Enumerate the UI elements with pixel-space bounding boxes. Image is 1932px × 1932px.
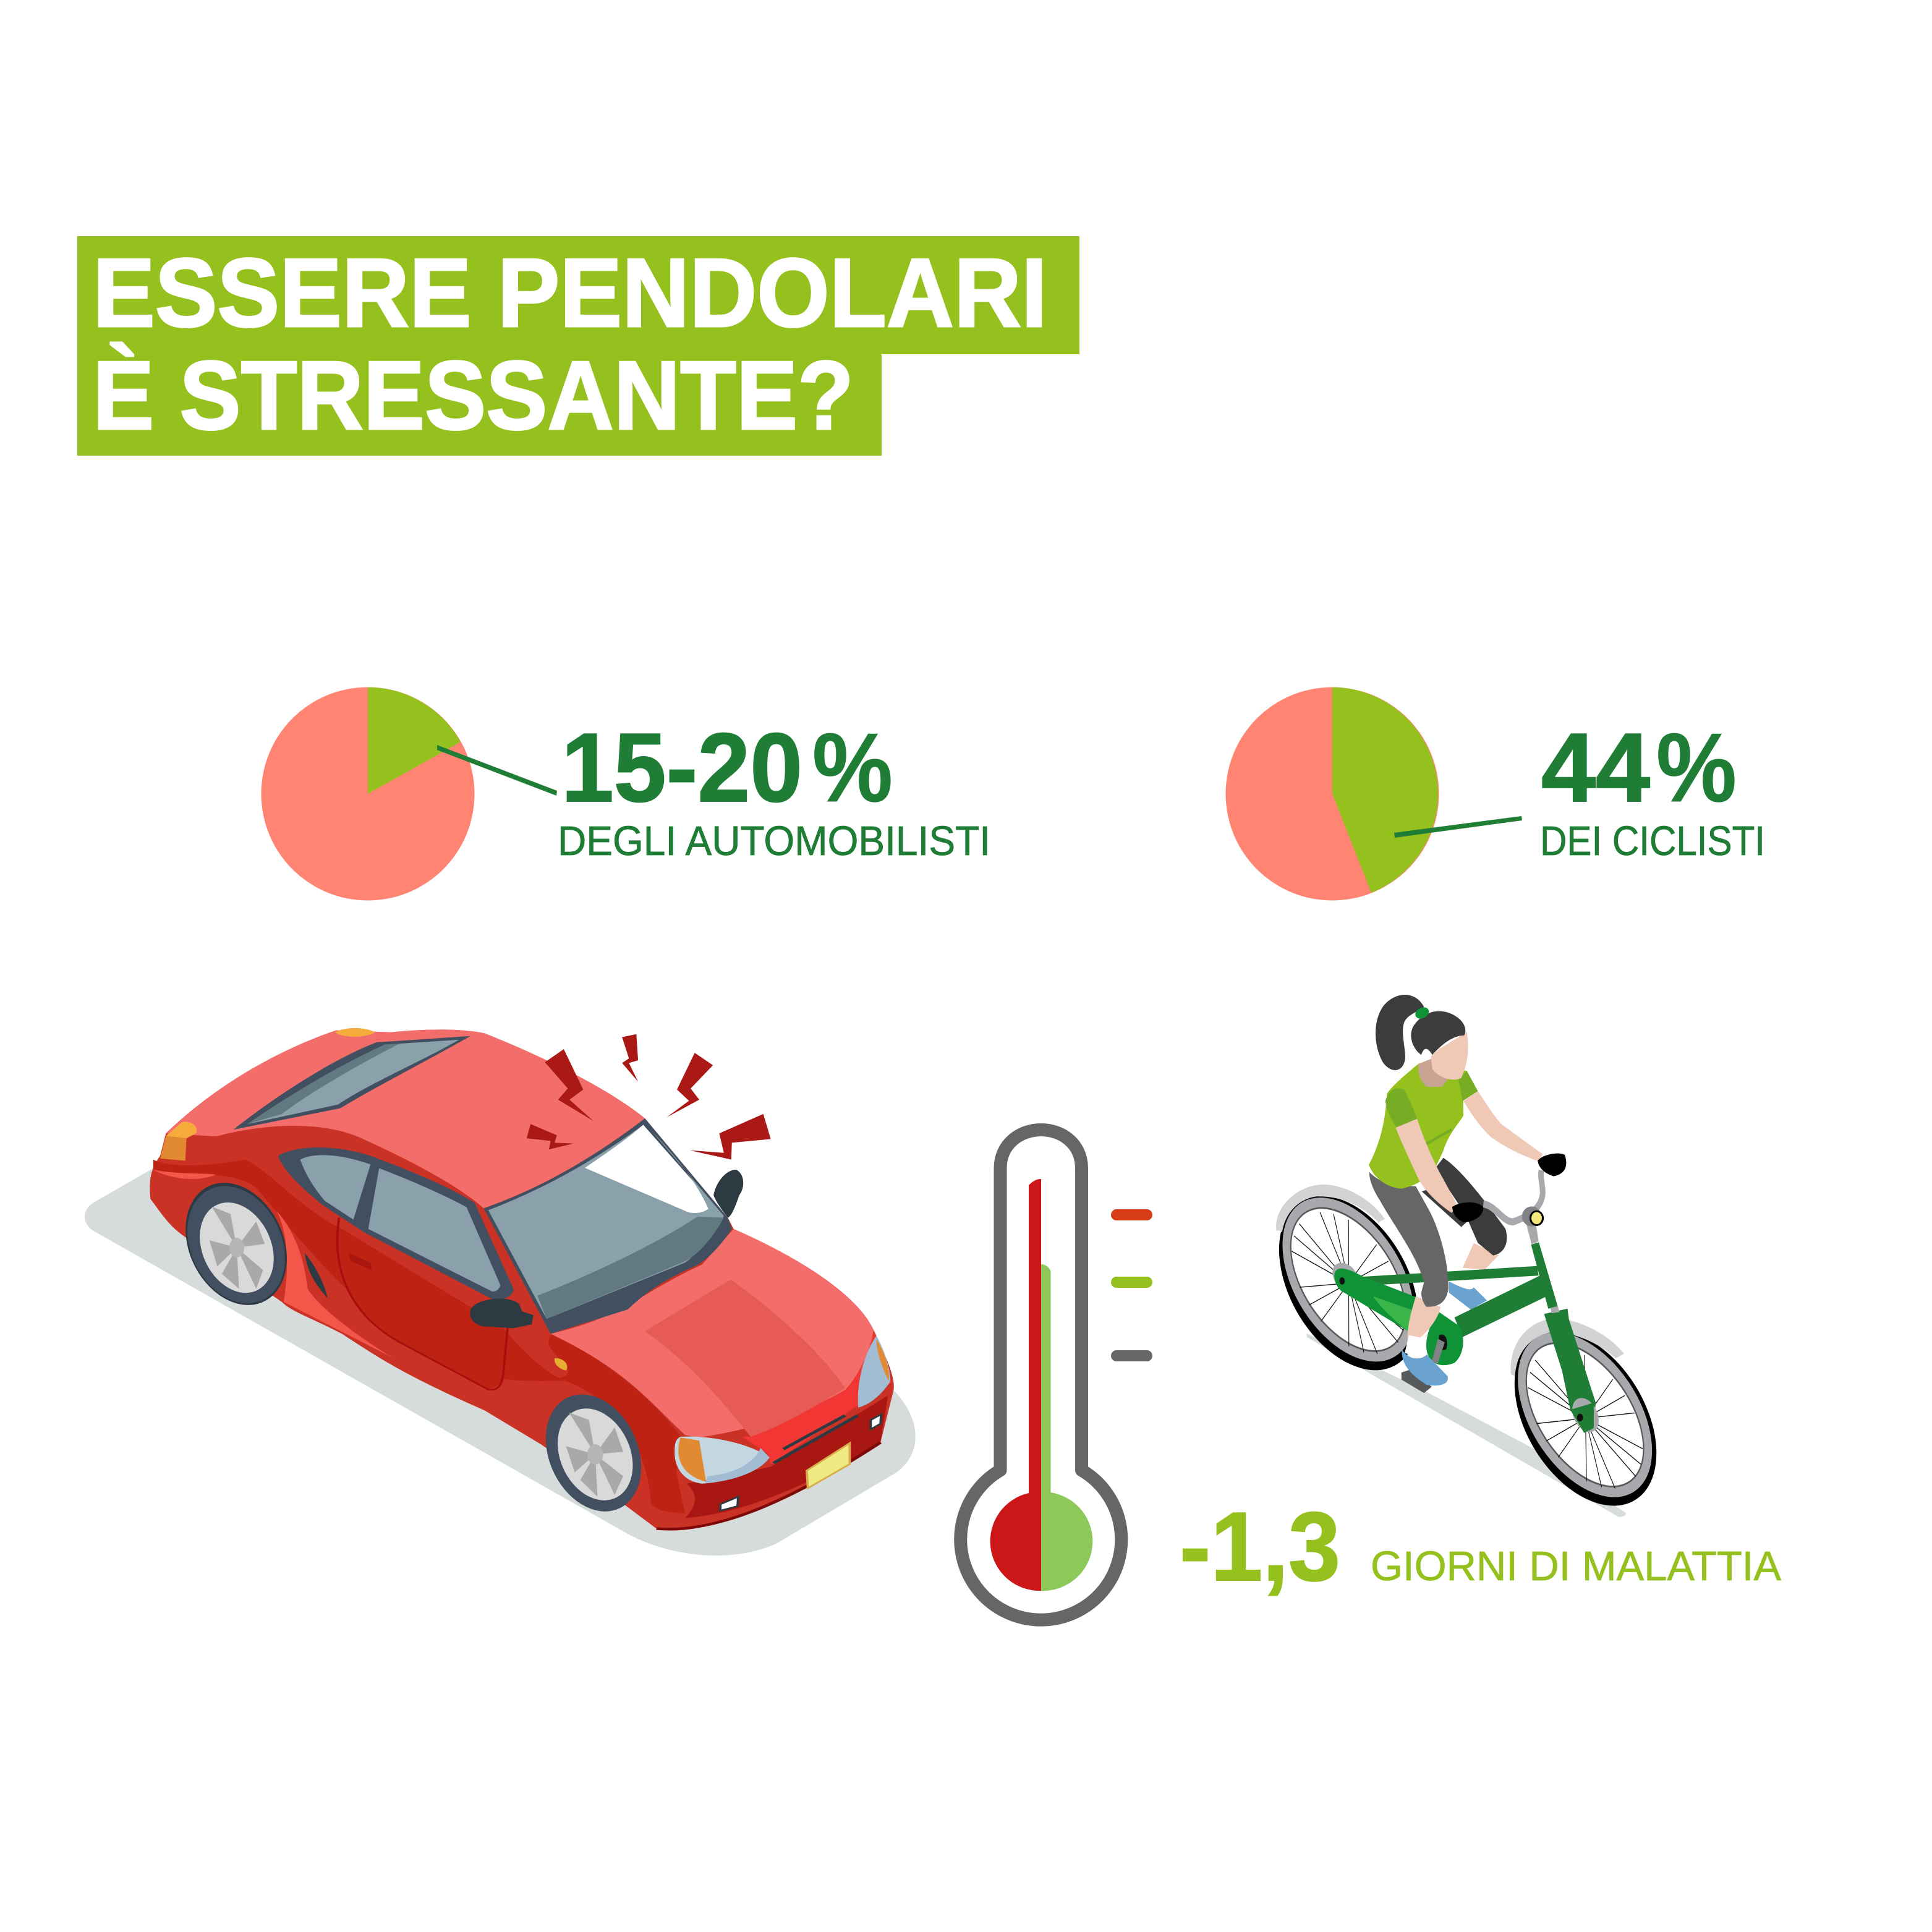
statistic: cyclists: DEI CICLISTI (1540, 818, 1765, 864)
statistic: drivers: % (812, 713, 893, 822)
rider neck and face (1418, 1032, 1468, 1087)
roof and trunk (166, 1029, 645, 1208)
car shadow (85, 1168, 916, 1555)
statistic: sick days: -1,3 (1180, 1492, 1340, 1601)
statistic: drivers: 15-20 (561, 713, 802, 822)
handlebar and saddle (1422, 1170, 1544, 1245)
hood panel (645, 1280, 845, 1437)
front bumper (657, 1332, 892, 1529)
far leg (1435, 1158, 1507, 1309)
gloves (1452, 1154, 1566, 1222)
title (77, 236, 1079, 456)
near leg and shoe (1369, 1172, 1449, 1385)
red level (990, 1179, 1041, 1591)
rear wheel (1253, 1162, 1445, 1405)
front hub (1567, 1391, 1604, 1439)
rider hair (1376, 995, 1465, 1070)
rider arms (1395, 1091, 1543, 1213)
scale marks (1111, 1209, 1152, 1361)
thermometer outline (961, 1130, 1121, 1620)
rear wheel (172, 1178, 300, 1310)
rear mudguard (1276, 1185, 1385, 1232)
chain guard (1334, 1269, 1463, 1365)
title: È STRESSANTE? (93, 341, 854, 450)
crank and pedal (1402, 1338, 1445, 1393)
hood (551, 1229, 874, 1437)
pie chart: drivers (261, 687, 557, 900)
front wheel (1488, 1296, 1683, 1541)
side windows (278, 1147, 514, 1300)
title: ESSERE PENDOLARI (93, 239, 1047, 347)
green level (1041, 1264, 1092, 1591)
bike frame (1363, 1242, 1596, 1433)
statistic: cyclists: % (1656, 713, 1737, 822)
windshield (483, 1118, 732, 1334)
statistic: cyclists (1540, 713, 1765, 864)
side mirrors (470, 1170, 743, 1328)
thermometer (961, 1130, 1152, 1620)
rear hub (1329, 1257, 1362, 1296)
statistic: sick days: GIORNI DI MALATTIA (1371, 1543, 1781, 1589)
statistic: cyclists: 44 (1541, 713, 1650, 822)
rear window (233, 1036, 470, 1130)
rider torso (1369, 1064, 1478, 1189)
lights (160, 1028, 890, 1484)
statistic: drivers (558, 713, 990, 864)
front wheel (533, 1389, 654, 1517)
head tube collar (1551, 1306, 1559, 1313)
front mudguard (1511, 1318, 1624, 1376)
car body (150, 1029, 894, 1531)
illustration: cyclist (1253, 995, 1683, 1541)
bike shadow (1307, 1334, 1626, 1517)
statistic: drivers: DEGLI AUTOMOBILISTI (558, 818, 990, 864)
illustration: red car (85, 1028, 916, 1555)
hair tie (1415, 1006, 1430, 1021)
statistic: sick days (1180, 1492, 1781, 1601)
stress lightning bolts (527, 1034, 771, 1160)
pie chart: cyclists (1225, 687, 1522, 900)
